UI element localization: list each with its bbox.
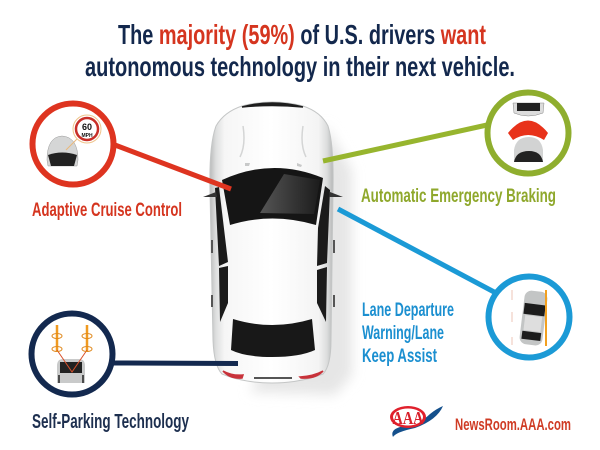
logo: AAA [390,406,443,437]
connector: lane departure [338,209,496,293]
connector: automatic emergency braking [323,125,487,161]
mirrors [203,192,343,197]
connector: self-parking [113,360,238,366]
label: lane departure warning / lane keep assist: Warning/Lane [362,323,444,344]
icon: adaptive cruise control [32,104,114,184]
rear bumper slot [254,377,292,379]
connector: adaptive cruise control [115,145,231,189]
right side windows [317,186,330,322]
washer nozzles [245,163,302,167]
label: lane departure warning / lane keep assist: Keep Assist [362,346,437,367]
label: self-parking technology: Self-Parking Technology [32,411,190,433]
icon: adaptive cruise control: 60 [82,122,92,132]
label: lane departure warning / lane keep assist: Lane Departure [362,300,454,321]
label: lane departure warning / lane keep assist [362,300,454,367]
left side windows [215,187,228,322]
car shadow [250,125,352,395]
icon: adaptive cruise control: MPH [81,133,93,139]
rear window [231,319,315,357]
windshield glare [260,174,320,214]
icon: automatic emergency braking [488,92,568,174]
car illustration [203,102,343,383]
label: adaptive cruise control: Adaptive Cruise Control [32,199,182,221]
windshield [222,168,323,225]
tail lights [223,371,323,378]
door handles [211,240,335,307]
hood creases [240,126,306,157]
icon: lane departure warning [488,276,570,358]
hood air intake [242,103,303,107]
title: The majority (59%) of U.S. drivers want [118,19,486,50]
icon: self-parking [32,314,112,394]
title [85,19,515,82]
car body [210,102,333,383]
logo: AAA: AAA [392,408,424,428]
